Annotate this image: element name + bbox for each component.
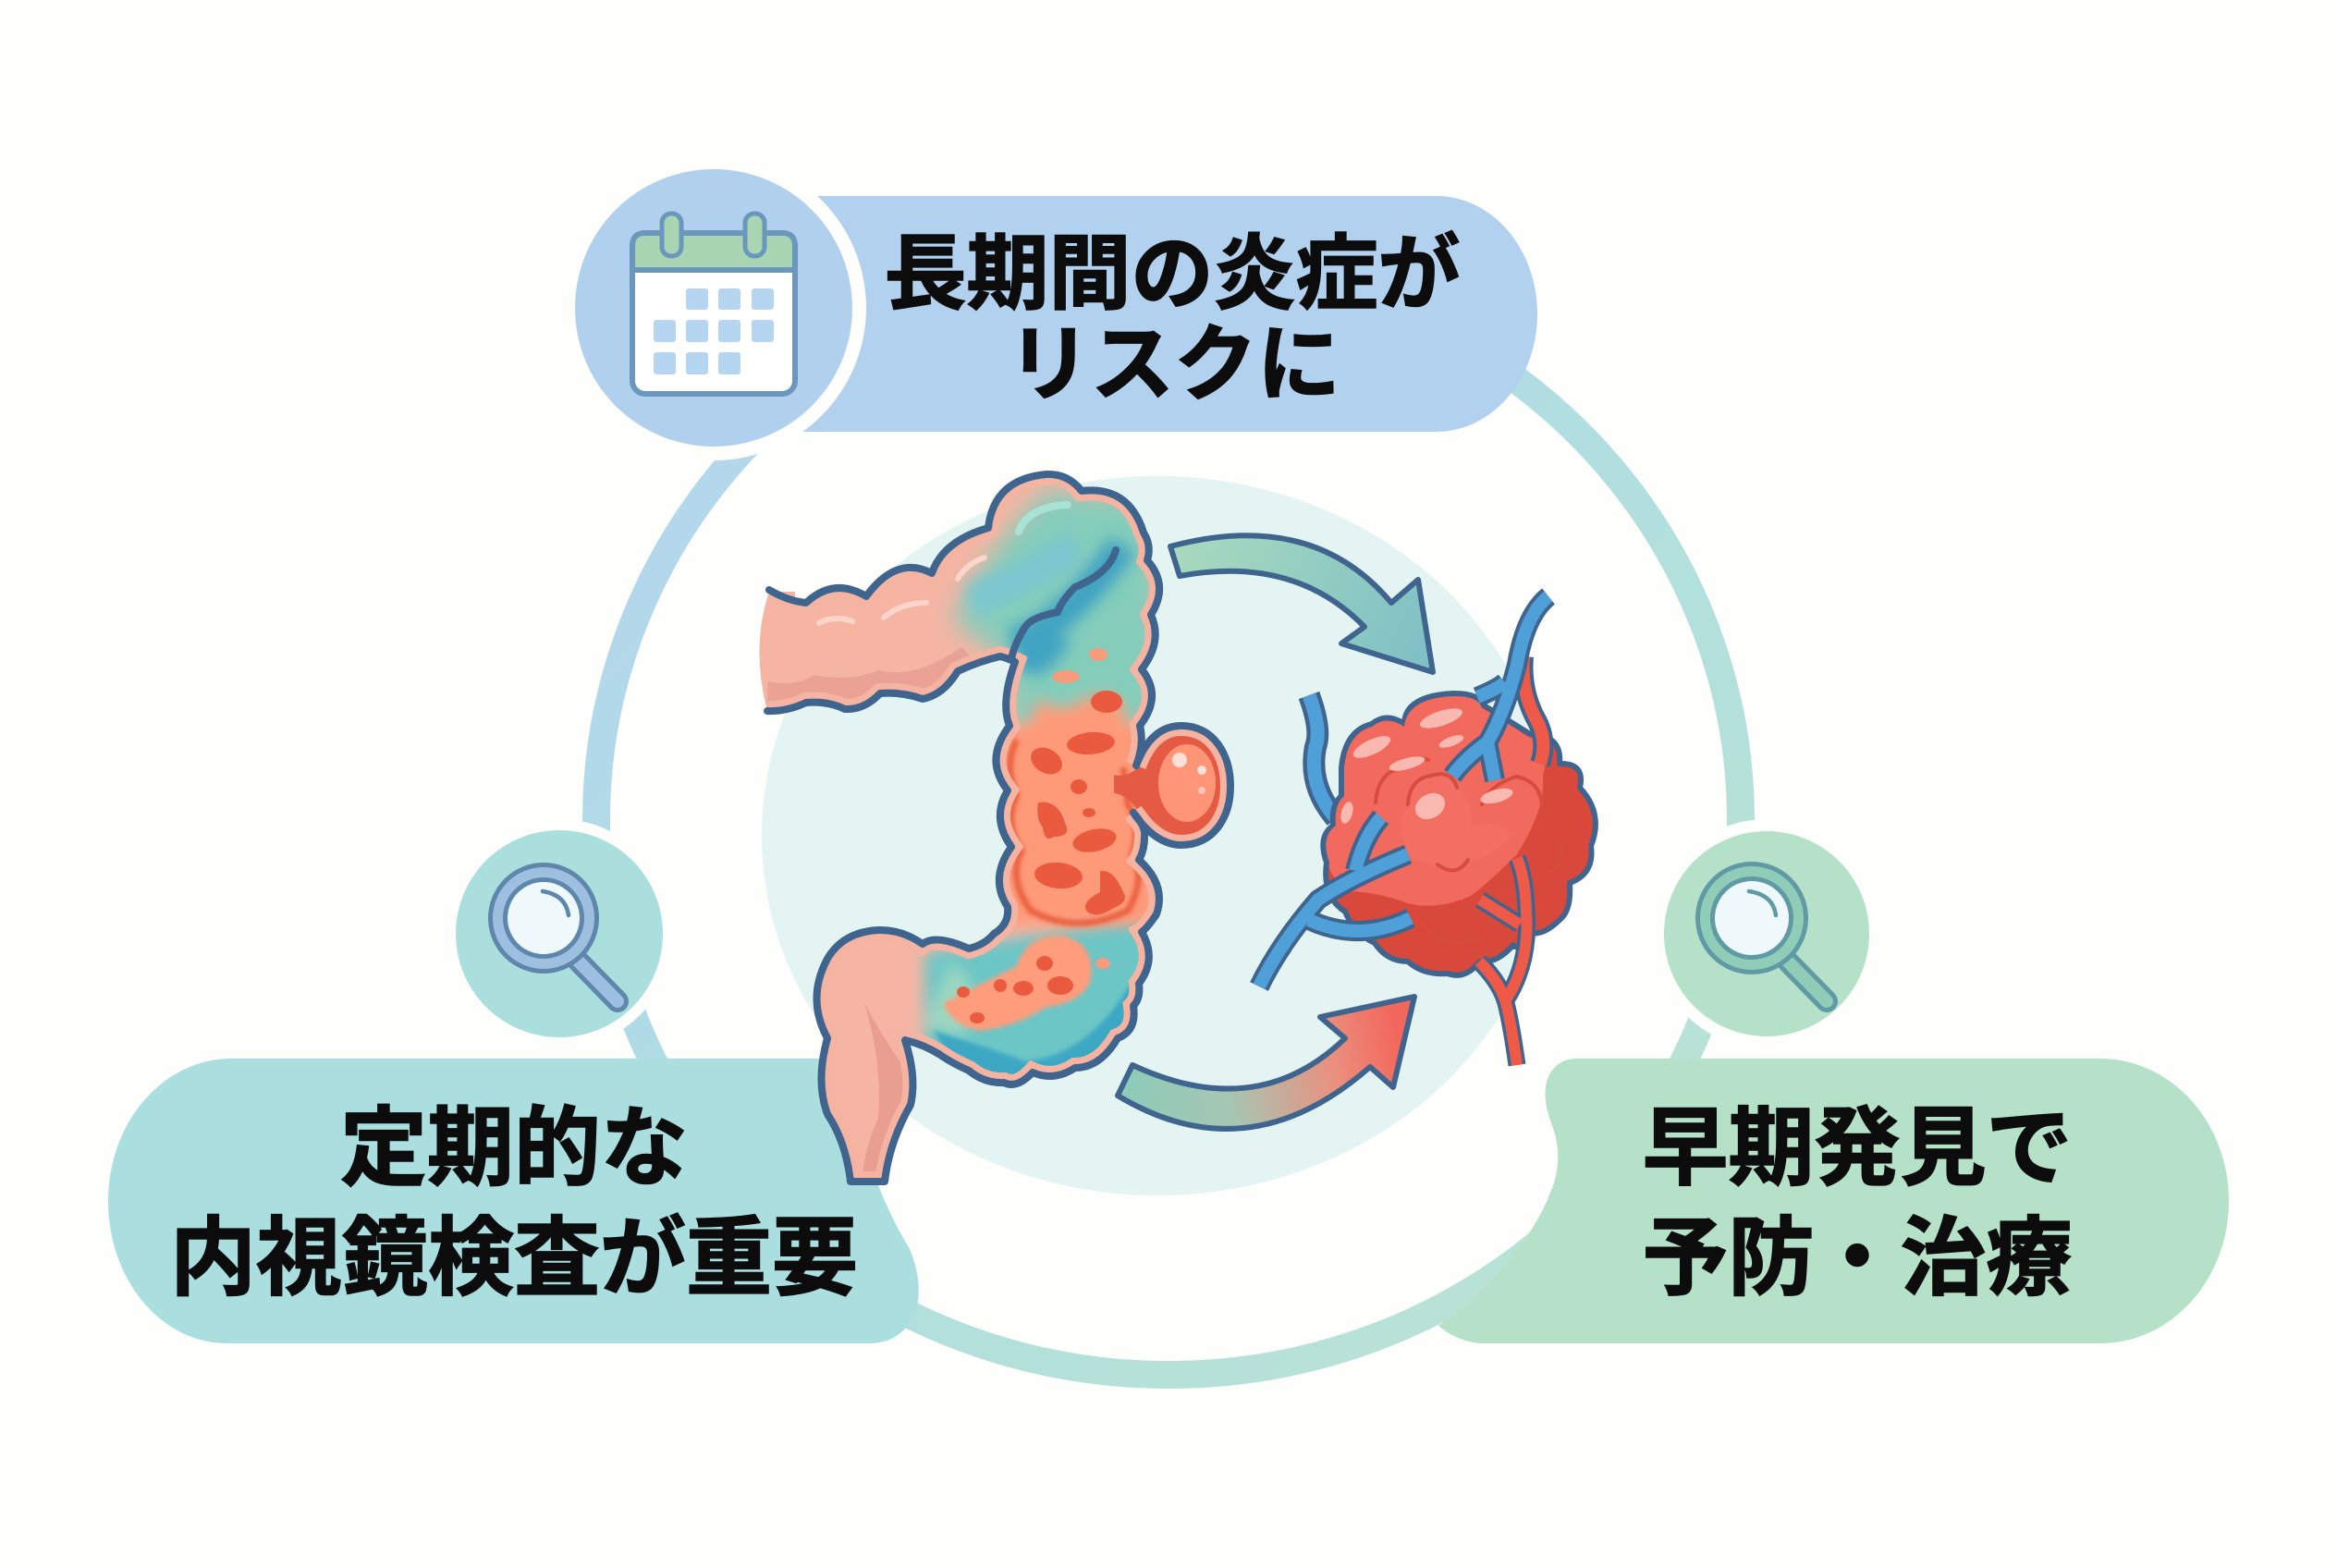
- magnifier badge: [1664, 831, 1869, 1036]
- heading: long-term inflammation: リスクに: [1008, 319, 1340, 411]
- badge ring gap: [1652, 819, 1881, 1048]
- pink rim: [767, 474, 1230, 1182]
- heading: long-term inflammation: 長期間の炎症が: [884, 227, 1461, 320]
- badge ring gap: [445, 819, 674, 1048]
- vein behind tumour: [1309, 695, 1336, 818]
- colon left end fill: [759, 592, 795, 711]
- tumour back mass: [1323, 693, 1596, 975]
- panel: long-term inflammation: [561, 155, 1537, 460]
- label pill: [1438, 1059, 2229, 1343]
- colon body colours: [767, 478, 1227, 1178]
- colon outline: [767, 474, 1230, 1182]
- icon: magnifier: [1705, 871, 1827, 1001]
- lower red vessel: [1479, 858, 1527, 1065]
- heading: early detection: 予防・治療: [1642, 1210, 2073, 1306]
- cycle ring: [596, 265, 1741, 1375]
- heading: long-term inflammation: [884, 227, 1461, 411]
- panel: regular endoscopy: [108, 819, 919, 1343]
- calendar badge: [575, 169, 852, 447]
- panel: central pale circle: [762, 476, 1553, 1195]
- tumour lobe lines: [1376, 758, 1560, 943]
- heading: early detection: 早期発見で: [1642, 1100, 2073, 1196]
- icon: magnifier: [497, 873, 618, 1001]
- label pill: [108, 1059, 919, 1343]
- upper red vessel: [1523, 656, 1543, 764]
- colon illustration: [760, 471, 1234, 1185]
- polyp fill: [1114, 736, 1220, 835]
- label pill: [795, 196, 1537, 432]
- tumour illustration: [1259, 596, 1596, 1065]
- heading: early detection: [1642, 1100, 2073, 1306]
- heading: regular endoscopy: 定期的な: [340, 1099, 688, 1196]
- tumour centre lobe: [1401, 774, 1511, 871]
- tumour highlights: [1339, 704, 1514, 825]
- arrow: colon to tumour (top): [1170, 535, 1433, 672]
- icon: calendar: [632, 214, 795, 394]
- colon ulcer spots: [957, 691, 1125, 1023]
- magnifier badge: [456, 830, 663, 1037]
- badge circle gap: [561, 155, 866, 460]
- inner red lobes: [1009, 740, 1138, 923]
- colon inner fold line: [1011, 550, 1116, 658]
- colon highlights: [819, 505, 1068, 623]
- arrow: tumour feed (bottom): [1118, 997, 1414, 1129]
- heading: regular endoscopy: [170, 1099, 858, 1306]
- heading: regular endoscopy: 内視鏡検査が重要: [170, 1210, 858, 1306]
- tumour front mass: [1326, 696, 1545, 906]
- panel: early detection: [1438, 819, 2229, 1343]
- blue veins: [1259, 596, 1548, 986]
